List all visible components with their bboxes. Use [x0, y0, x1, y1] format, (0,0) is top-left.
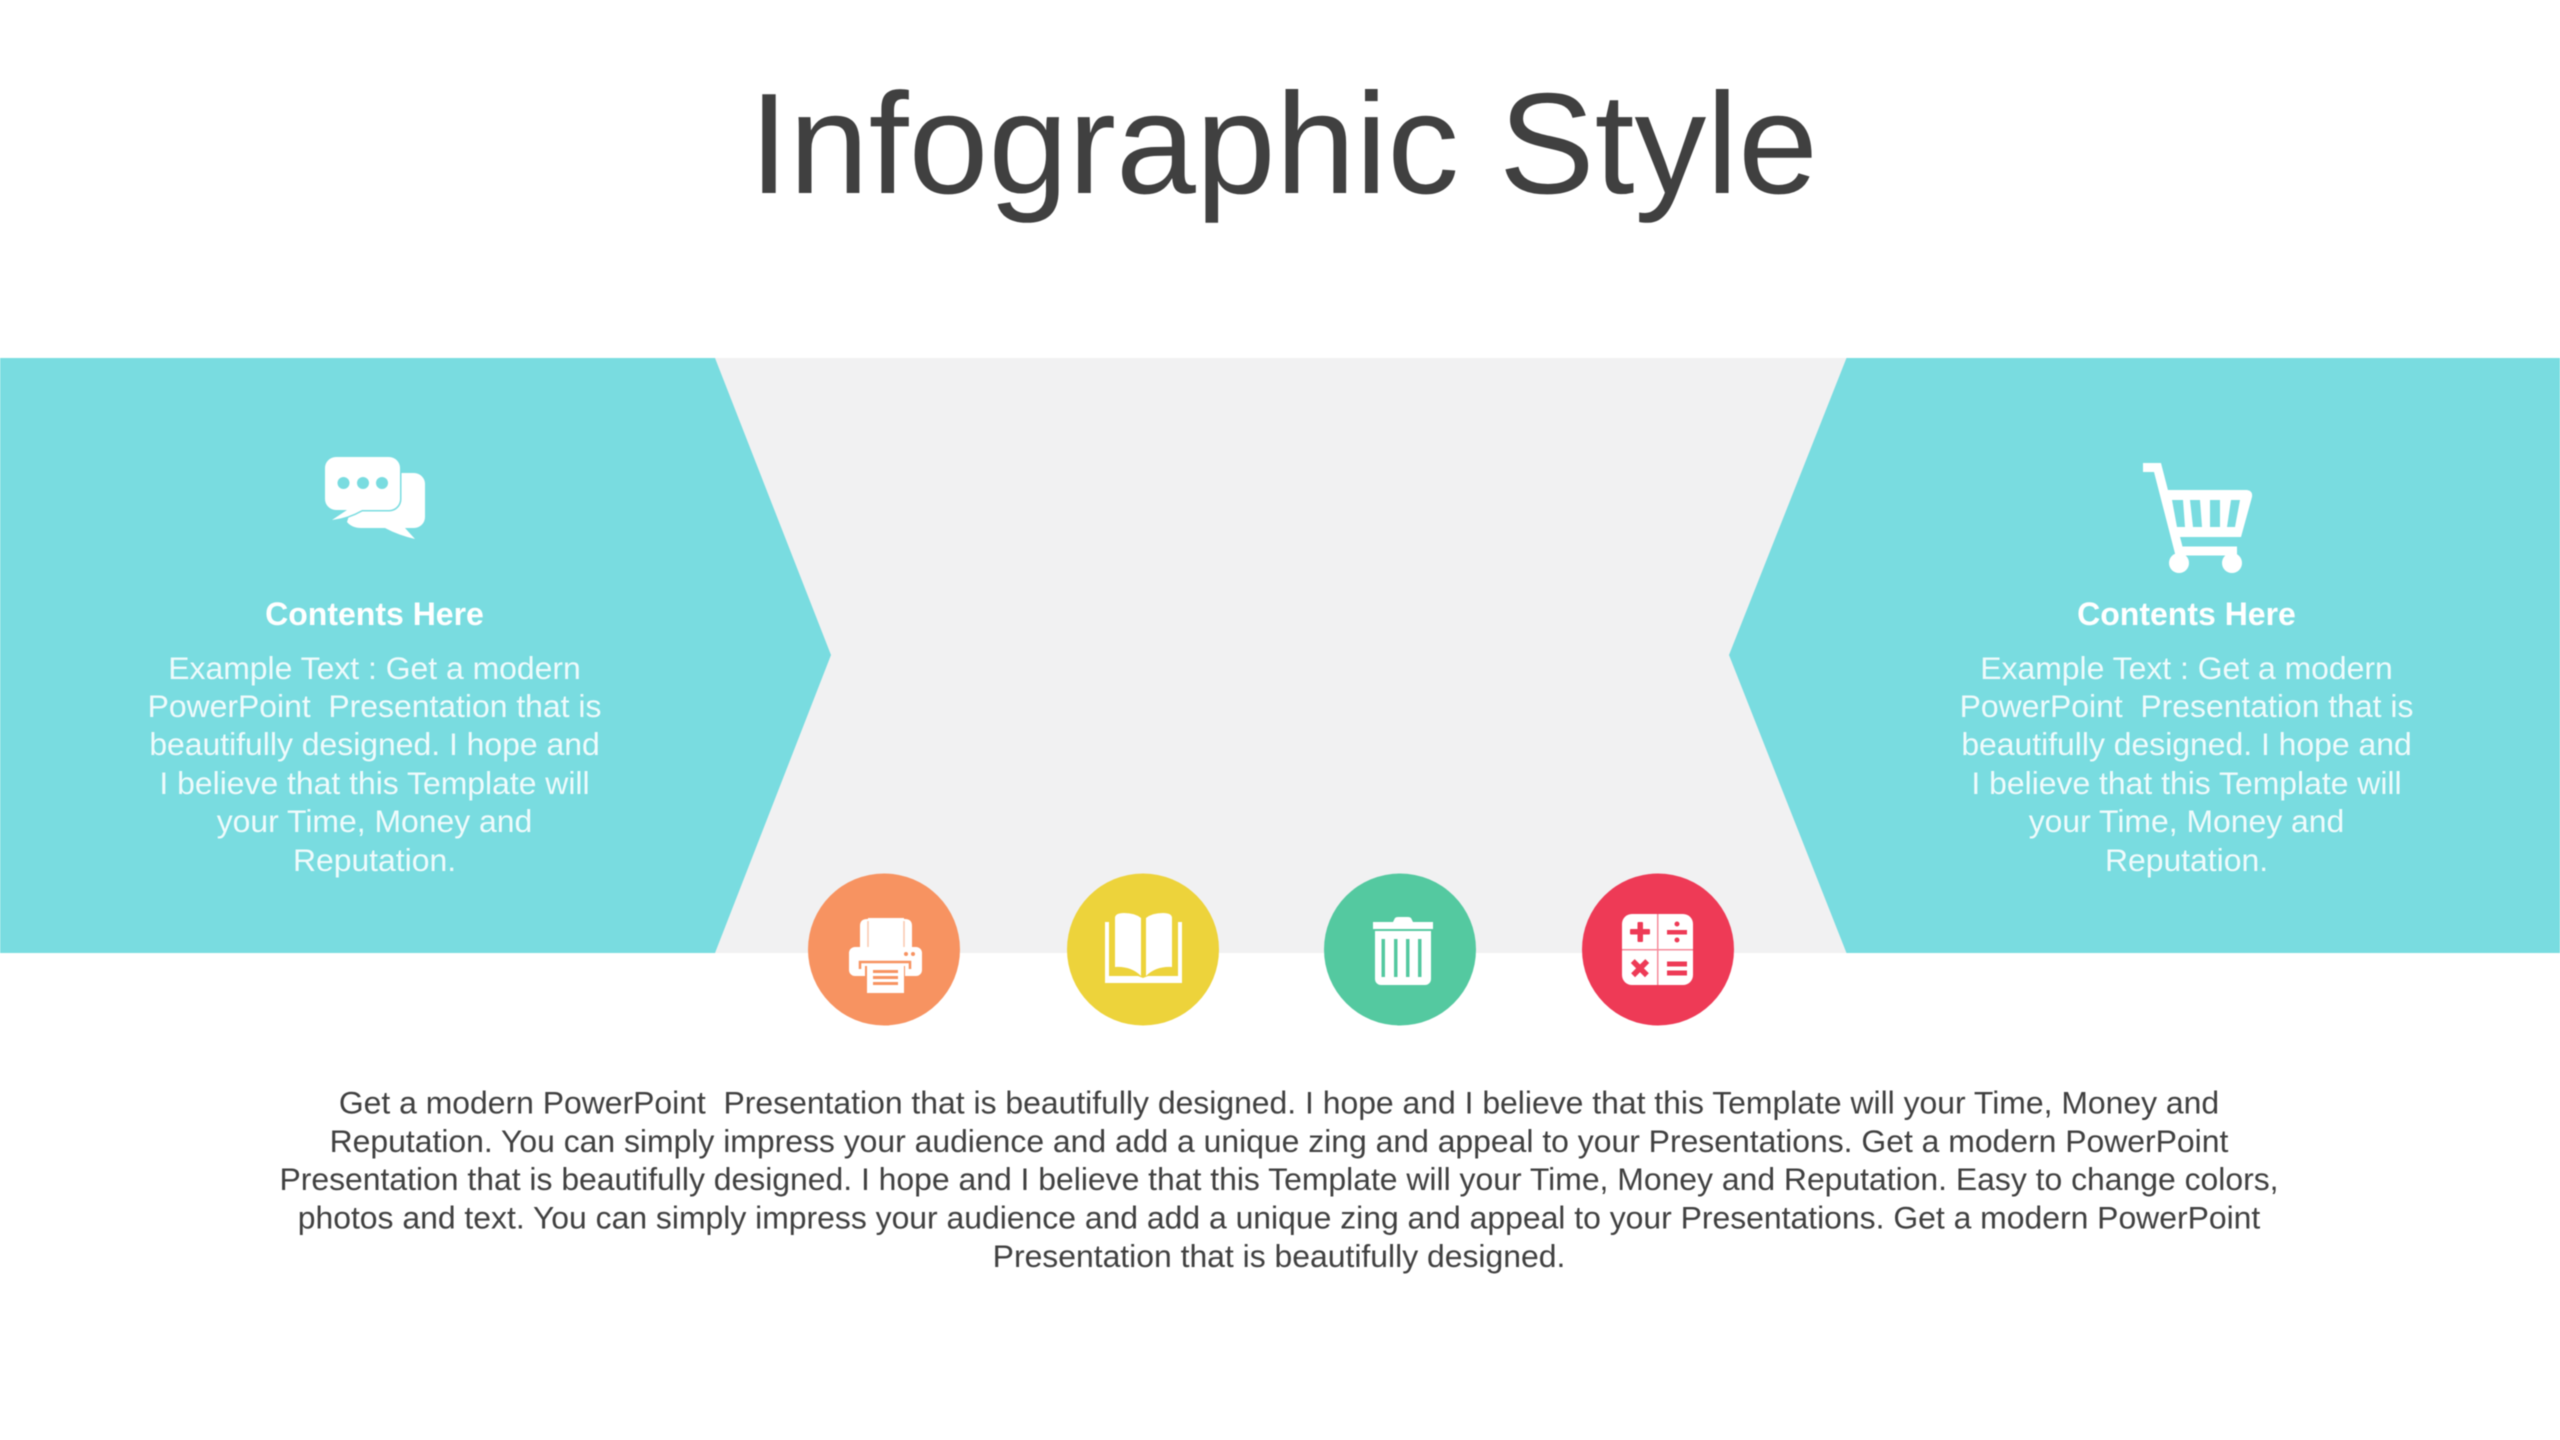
icon: book badge: [1067, 874, 1219, 1026]
text block: bottom paragraph: Presentation that is beautifully designed.: [993, 1238, 1565, 1274]
text block: bottom paragraph: Presentation that is beautifully designed. I hope and I believe that this Template will your Time, Money and Reputation. Easy to change colors,: [279, 1161, 2279, 1197]
text block: right body: [1960, 650, 2413, 878]
icon: chat bubbles: [325, 457, 425, 539]
icon: trash badge: [1324, 874, 1476, 1026]
title: Infographic Style: [749, 64, 1818, 224]
text block: left body: I believe that this Template will: [159, 765, 590, 801]
text block: bottom paragraph: photos and text. You can simply impress your audience and add a unique zing and appeal to your Presentations. Get a modern PowerPoint: [298, 1200, 2260, 1236]
icon: shopping cart: [2143, 468, 2252, 573]
icon: calculator badge: [1582, 874, 1734, 1026]
text block: bottom paragraph: [279, 1084, 2279, 1274]
text block: left body: [148, 650, 601, 878]
text block: right body: I believe that this Template will: [1971, 765, 2402, 801]
text block: right body: Example Text : Get a modern: [1980, 650, 2393, 686]
panel: left teal arrow: [0, 358, 831, 953]
text block: left body: your Time, Money and: [217, 803, 532, 839]
heading: right contents: Contents Here: [2077, 596, 2296, 632]
text block: left body: Reputation.: [293, 842, 456, 878]
text block: right body: PowerPoint Presentation that is: [1960, 688, 2413, 724]
text block: bottom paragraph: Get a modern PowerPoint Presentation that is beautifully designed. I hope and I believe that this Template will your Time, Money and: [339, 1084, 2219, 1120]
text block: right body: your Time, Money and: [2029, 803, 2344, 839]
heading: left contents: Contents Here: [265, 596, 484, 632]
icon: printer badge: [808, 874, 960, 1026]
text block: right body: Reputation.: [2105, 842, 2268, 878]
center grey band: [700, 358, 1860, 953]
text block: left body: beautifully designed. I hope and: [149, 726, 600, 762]
text block: bottom paragraph: Reputation. You can simply impress your audience and add a unique zing and appeal to your Presentations. Get a modern PowerPoint: [330, 1123, 2228, 1159]
text block: right body: beautifully designed. I hope and: [1961, 726, 2412, 762]
text block: left body: Example Text : Get a modern: [168, 650, 581, 686]
panel: right teal arrow: [1729, 358, 2560, 953]
text block: left body: PowerPoint Presentation that is: [148, 688, 601, 724]
